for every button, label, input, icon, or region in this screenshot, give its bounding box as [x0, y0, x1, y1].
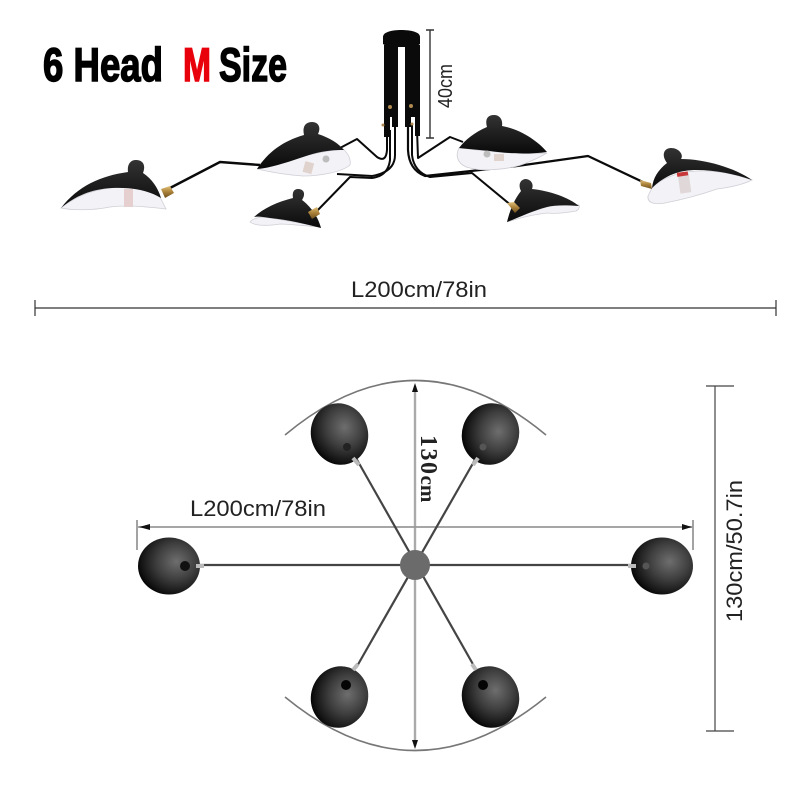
dimension: depth [706, 386, 747, 731]
shade: inner left upper [257, 122, 350, 176]
head: bottom right [454, 659, 527, 735]
vertical dimension arrow [412, 383, 418, 749]
shade: inner right upper [457, 115, 547, 170]
title [43, 38, 287, 91]
head: top right [454, 396, 527, 472]
dimension: height 40cm [426, 30, 457, 138]
shade: far right [640, 148, 752, 204]
dimension: overall length: L200cm/78in [351, 277, 487, 302]
dimension: overall length [35, 277, 776, 316]
arms [170, 125, 645, 213]
span arcs [285, 380, 546, 750]
head: top left [303, 396, 376, 472]
dimension: height 40cm: 40cm [435, 64, 457, 108]
shade: inner right lower [507, 179, 579, 222]
shade: inner left lower [250, 189, 321, 228]
head: left [138, 538, 204, 594]
top view diagram [137, 380, 693, 750]
label: diameter: 130 cm [415, 435, 441, 503]
horizontal dimension arrow [137, 520, 693, 550]
head: right [628, 538, 693, 594]
lamp side view [61, 30, 752, 228]
ceiling mount and stems [382, 30, 420, 137]
title: M [183, 38, 211, 91]
title: Size [219, 38, 287, 91]
arms [198, 458, 632, 668]
title: 6 Head [43, 38, 163, 91]
shade: far left [61, 160, 174, 210]
label: width: L200cm/78in [190, 496, 326, 521]
hub [400, 550, 430, 580]
head: bottom left [303, 659, 376, 735]
dimension: depth: 130cm/50.7in [722, 480, 747, 622]
